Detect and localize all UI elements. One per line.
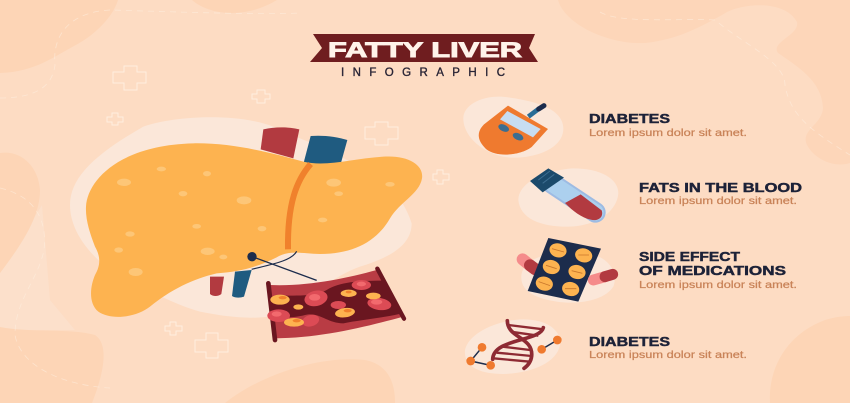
item: diabetes second [465, 319, 747, 374]
item: side effect of medications [521, 238, 797, 303]
description: Lorem ipsum dolor sit amet. [589, 350, 747, 361]
icon: dna [465, 319, 562, 374]
heading: FATS IN THE BLOOD [639, 181, 802, 195]
liver shape [86, 143, 422, 317]
blood cells [267, 280, 392, 328]
decorative plus icons [107, 66, 449, 358]
orange ligament [288, 164, 311, 249]
description: Lorem ipsum dolor sit amet. [639, 196, 797, 207]
heading: SIDE EFFECT [639, 250, 740, 264]
title text: FATTY LIVER [328, 38, 523, 62]
subtitle: INFOGRAPHIC [341, 67, 505, 79]
item: diabetes [463, 97, 747, 158]
lower blue vessel [232, 270, 252, 298]
pale backdrop [70, 117, 412, 318]
description: Lorem ipsum dolor sit amet. [589, 128, 747, 139]
curved line [252, 251, 297, 269]
icon: glucose meter [463, 97, 563, 158]
heading: DIABETES [589, 335, 670, 349]
title banner [310, 34, 538, 62]
lower red vessel [210, 277, 224, 296]
upper red vessel [261, 127, 299, 158]
icon: test tube [518, 168, 618, 227]
liver illustration [70, 117, 422, 340]
artery cross-section [267, 269, 404, 340]
heading line two: OF MEDICATIONS [639, 264, 786, 278]
item: fats in the blood [518, 168, 802, 227]
icon: pills [521, 238, 615, 303]
pointer [252, 257, 317, 280]
description: Lorem ipsum dolor sit amet. [639, 280, 797, 291]
fat spots [114, 167, 395, 276]
upper blue vessel [303, 136, 347, 164]
heading: DIABETES [589, 112, 670, 126]
